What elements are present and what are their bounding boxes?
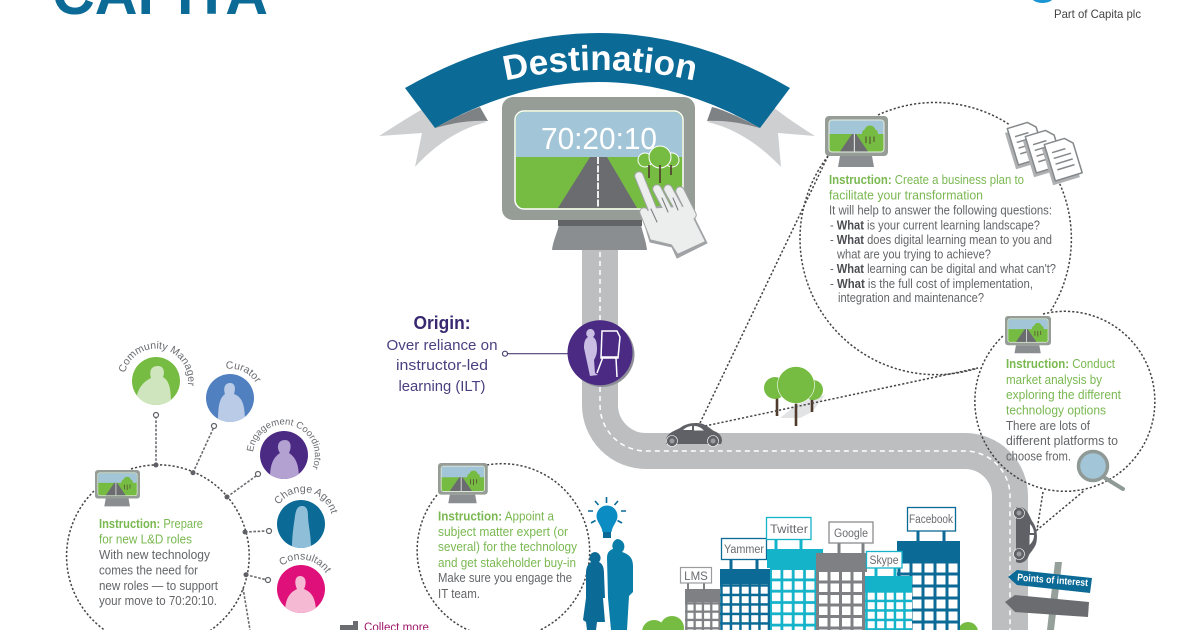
dotted route lines from first car xyxy=(700,156,978,426)
market analysis text: Instruction: Conduct xyxy=(1006,357,1115,371)
new roles text xyxy=(99,517,218,608)
business plan text: - What is the full cost of implementation, xyxy=(830,277,1033,291)
market analysis text xyxy=(1006,357,1121,464)
role: Change Agent xyxy=(274,486,338,548)
icon: pointing hand xyxy=(639,176,707,258)
signpost xyxy=(1005,562,1092,630)
banner tails xyxy=(379,106,487,167)
screen trees xyxy=(638,146,679,183)
subject matter expert text: IT team. xyxy=(438,587,480,601)
icon: two business people xyxy=(583,539,633,630)
market analysis text: There are lots of xyxy=(1006,419,1090,433)
destination banner xyxy=(379,33,815,167)
role connectors xyxy=(154,412,272,630)
panel: subject matter expert instruction xyxy=(417,463,590,630)
sat nav destination screen xyxy=(502,97,695,250)
icon: monitor xyxy=(1005,316,1051,353)
new roles text: comes the need for xyxy=(99,564,198,578)
new roles text: your move to 70:20:10. xyxy=(99,594,217,608)
icon: car on vertical road xyxy=(1014,507,1037,563)
banner band xyxy=(405,33,790,128)
subject matter expert text: and get stakeholder buy-in xyxy=(438,556,576,570)
subject matter expert text: subject matter expert (or xyxy=(438,525,568,539)
business plan text: - What does digital learning mean to you and xyxy=(830,233,1052,247)
building: Google: Google xyxy=(834,528,868,540)
market analysis text: exploring the different xyxy=(1006,388,1121,402)
Part of Capita plc logo: Part of Capita plc xyxy=(1054,7,1141,21)
icon: monitor xyxy=(95,470,140,506)
business plan text: what are you trying to achieve? xyxy=(836,248,991,262)
road with dashed centre line xyxy=(600,245,1010,630)
role: Consultant: Consultant xyxy=(280,554,331,574)
origin callout: Over reliance on xyxy=(386,337,498,354)
icon: magnifying glass xyxy=(1078,452,1123,489)
market analysis text: choose from. xyxy=(1006,450,1071,464)
building: Skype xyxy=(865,552,912,630)
role: Change Agent: Change Agent xyxy=(274,486,338,514)
business plan text: - What learning can be digital and what can't? xyxy=(830,262,1056,276)
role: Curator xyxy=(206,361,261,422)
subject matter expert text xyxy=(438,510,578,601)
role: Community Manager xyxy=(119,341,194,405)
new roles text: new roles — to support xyxy=(99,579,218,593)
building: Yammer: Yammer xyxy=(724,544,764,556)
business plan text: facilitate your transformation xyxy=(829,188,983,202)
Part of Capita plc logo xyxy=(1032,0,1141,21)
new roles text: Instruction: Prepare xyxy=(99,517,203,531)
new roles text: for new L&D roles xyxy=(99,532,192,546)
origin callout: instructor-led xyxy=(396,357,488,374)
building: Facebook xyxy=(897,508,960,630)
market analysis text: technology options xyxy=(1006,404,1106,418)
building: Twitter xyxy=(766,518,823,630)
subject matter expert text: Instruction: Appoint a xyxy=(438,510,554,524)
subject matter expert text: several) for the technology xyxy=(438,540,578,554)
icon: instructor at flipchart xyxy=(570,322,634,387)
building: Facebook: Facebook xyxy=(909,514,953,526)
building: Yammer xyxy=(720,538,770,630)
panel: market analysis instruction xyxy=(975,311,1155,530)
business plan text: It will help to answer the following questions: xyxy=(829,204,1052,218)
origin callout: learning (ILT) xyxy=(398,378,486,395)
building: LMS xyxy=(680,568,720,630)
business plan text: - What is your current learning landscape? xyxy=(830,218,1040,232)
role: Consultant xyxy=(277,554,331,613)
icon: monitor xyxy=(438,463,488,503)
business plan text: integration and maintenance? xyxy=(838,291,984,305)
skyline of technology buildings xyxy=(680,508,960,630)
role: Curator: Curator xyxy=(226,361,261,382)
icon: light bulb xyxy=(588,497,626,538)
market analysis text: different platforms to xyxy=(1006,434,1118,448)
collect more label with icon xyxy=(340,621,429,630)
building: Skype: Skype xyxy=(870,555,898,567)
business plan text: Instruction: Create a business plan to xyxy=(829,173,1024,187)
new roles text: With new technology xyxy=(99,548,211,562)
icon: monitor xyxy=(825,116,888,167)
panel: business plan instruction xyxy=(800,102,1083,375)
subject matter expert text: Make sure you engage the xyxy=(438,571,572,585)
origin callout xyxy=(386,313,634,395)
icon: car on horizontal road xyxy=(666,423,722,446)
role: Engagement Coordinator: Engagement Coordinator xyxy=(246,419,321,470)
market analysis text: market analysis by xyxy=(1006,373,1103,387)
role: Community Manager: Community Manager xyxy=(119,341,194,386)
business plan text xyxy=(829,173,1056,305)
building: Twitter: Twitter xyxy=(770,524,808,536)
building: Google xyxy=(816,522,873,630)
panel: new L&D roles instruction xyxy=(67,412,272,630)
trees by the road xyxy=(764,366,825,426)
icon: documents xyxy=(1004,120,1083,185)
building: LMS: LMS xyxy=(684,571,708,583)
points of interest sign: Points of interest xyxy=(1017,573,1089,589)
headline ratio: 70:20:10 xyxy=(541,121,657,156)
banner title: Destination xyxy=(503,44,695,80)
origin label: Origin: xyxy=(414,313,470,333)
bushes behind buildings xyxy=(642,616,978,630)
